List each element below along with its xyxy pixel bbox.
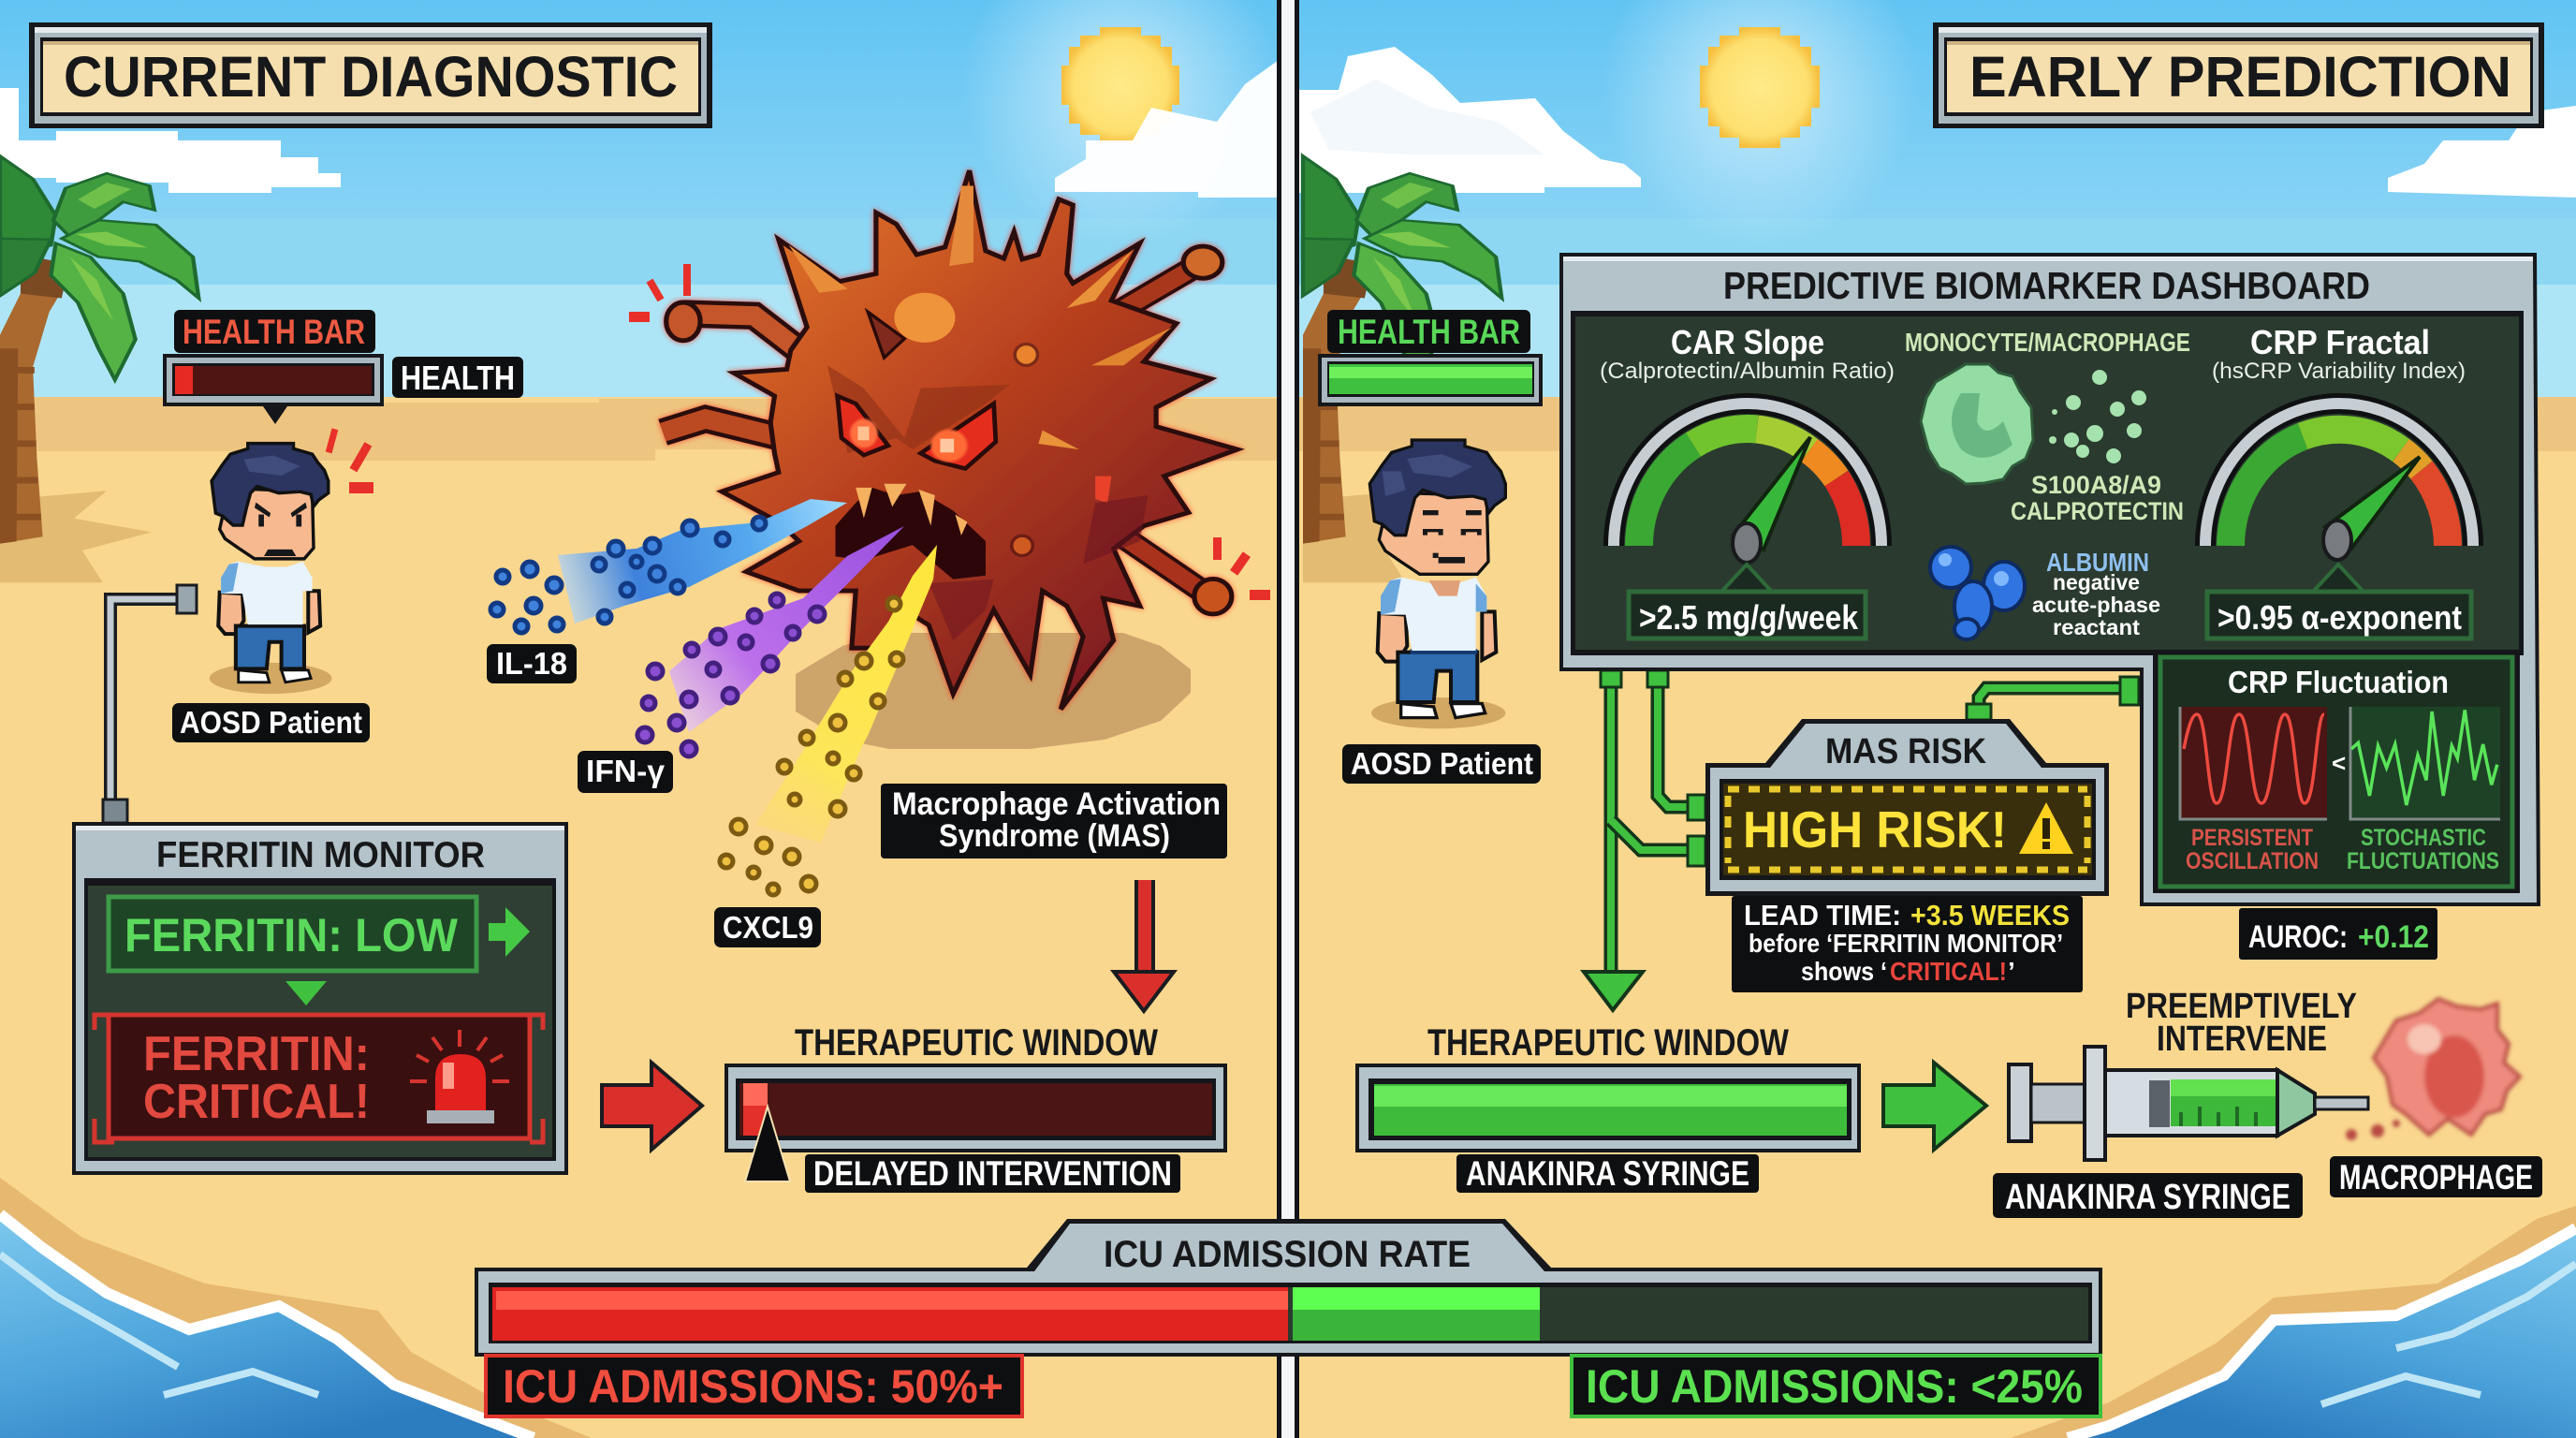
label: IFN-gamma: IFN-γ [586, 754, 666, 788]
label: ICU admissions left: ICU ADMISSIONS: 50%+ [503, 1360, 1003, 1413]
less-than sign: < [2332, 749, 2346, 777]
AUROC callout: AUROC: [2248, 919, 2348, 955]
label: S100A8/A9 calprotectin [2011, 471, 2184, 525]
gauge: CRP fractal [2205, 404, 2473, 560]
callout: lead time: shows ‘ [1801, 957, 1887, 986]
virus shadow [796, 633, 1191, 749]
callout: lead time: before ‘FERRITIN MONITOR’ [1749, 929, 2063, 958]
icon: anakinra syringe [2009, 1047, 2368, 1160]
ferritin low readout: FERRITIN: LOW [124, 909, 459, 961]
left shoreline waves [0, 1178, 592, 1438]
label: macrophage activation syndrome [881, 784, 1227, 858]
right therapeutic window heading: THERAPEUTIC WINDOW [1427, 1022, 1789, 1064]
ferritin critical readout: FERRITIN: [143, 1027, 370, 1081]
label: CXCL9: CXCL9 [723, 910, 813, 945]
left health bar [163, 310, 384, 424]
cytokine spray: IL-18 [490, 499, 847, 633]
green admission bar [1293, 1287, 1540, 1341]
icon: albumin protein [1930, 547, 2025, 639]
dashboard title: PREDICTIVE BIOMARKER DASHBOARD [1723, 264, 2370, 307]
hazard stripes [1728, 789, 2087, 870]
left palm tree [0, 156, 198, 582]
label: albumin: acute-phase [2032, 593, 2160, 617]
red sparks [326, 264, 1270, 600]
heading: current diagnostic [29, 22, 712, 128]
callout: lead time: LEAD TIME: [1744, 899, 1901, 932]
icon: green down arrow [285, 981, 327, 1005]
left health bar: HEALTH BAR [183, 313, 365, 351]
alert text: HIGH RISK! [1743, 800, 2007, 858]
AUROC callout: +0.12 [2358, 919, 2429, 955]
panel: ICU admission rate [475, 1219, 2102, 1357]
right patient label: AOSD Patient [1351, 746, 1533, 781]
right health bar [1318, 310, 1543, 406]
right therapeutic window bar [1355, 1064, 1861, 1152]
marker: delay pointer [745, 1107, 790, 1181]
arrow: MAS down to therapeutic window [1114, 880, 1174, 1011]
label: albumin: negative [2053, 570, 2140, 594]
ferritin critical readout: CRITICAL! [143, 1075, 370, 1129]
gauge heading: CAR slope [1600, 323, 1895, 384]
panel: predictive biomarker dashboard [1559, 253, 2540, 906]
label: albumin [2032, 548, 2160, 639]
callout: lead time: ’ [2008, 957, 2015, 986]
label: preemptively intervene [2126, 987, 2357, 1059]
left patient label: AOSD Patient [180, 705, 362, 740]
caption: stochastic fluctuations: STOCHASTIC [2361, 825, 2486, 851]
label: monocyte macrophage: MONOCYTE/MACROPHAGE [1905, 328, 2190, 357]
label: albumin: ALBUMIN [2046, 548, 2149, 577]
callout: lead time: CRITICAL! [1890, 957, 2007, 986]
gauge heading: CRP fractal: (hsCRP Variability Index) [2212, 359, 2466, 384]
label: anakinra syringe under icon: ANAKINRA SYRINGE [2005, 1178, 2291, 1217]
label: anakinra syringe under bar: ANAKINRA SYRINGE [1466, 1154, 1749, 1193]
caption: stochastic fluctuations [2347, 825, 2499, 874]
right palm tree [1303, 156, 1501, 582]
callout: lead time: +3.5 WEEKS [1910, 899, 2070, 932]
caption: persistent oscillation: PERSISTENT [2191, 825, 2313, 851]
left patient, sad [210, 444, 332, 694]
ferritin low readout [109, 897, 476, 971]
heading: early prediction: EARLY PREDICTION [1969, 45, 2511, 109]
ferritin critical readout [95, 1015, 543, 1142]
virus monster [663, 170, 1237, 710]
panel: MAS risk [1705, 719, 2109, 896]
gauge heading: CRP fractal [2212, 323, 2466, 384]
gauge threshold: CRP fractal [2207, 565, 2471, 638]
sub-panel title: CRP Fluctuation [2228, 665, 2449, 699]
label: preemptively intervene: PREEMPTIVELY [2126, 987, 2357, 1026]
chart: stochastic fluctuations [2349, 707, 2500, 819]
icon: monocyte cell releasing calprotectin [1921, 364, 2146, 484]
label: IFN-gamma [578, 751, 673, 793]
icon: warning triangle [2019, 802, 2073, 854]
label: ICU admissions right: ICU ADMISSIONS: <25% [1586, 1360, 2083, 1413]
label: S100A8/A9 calprotectin: S100A8/A9 [2031, 471, 2161, 499]
arrow: green right [1883, 1063, 1986, 1150]
panel title: FERRITIN MONITOR [156, 835, 485, 875]
label: albumin: reactant [2053, 615, 2140, 639]
label: preemptively intervene: INTERVENE [2157, 1020, 2327, 1059]
gauge threshold: CRP fractal: >0.95 α-exponent [2217, 598, 2462, 637]
gauge: CAR slope [1614, 404, 1881, 563]
label: macrophage activation syndrome: Macrophage Activation [892, 786, 1221, 822]
panel title: MAS RISK [1825, 732, 1987, 771]
right health bar: HEALTH BAR [1338, 313, 1520, 351]
cytokine spray: IFN-gamma [637, 526, 904, 756]
sub-panel: CRP fluctuation [2153, 652, 2520, 893]
caption: persistent oscillation: OSCILLATION [2186, 848, 2319, 874]
ICU title: ICU ADMISSION RATE [1104, 1234, 1471, 1275]
gauge heading: CRP fractal: CRP Fractal [2250, 323, 2430, 361]
right shoreline waves [2011, 1206, 2576, 1438]
icon: alarm siren [410, 1030, 509, 1123]
icon: green right arrow [489, 907, 530, 957]
label: delayed intervention: DELAYED INTERVENTION [813, 1154, 1172, 1193]
red admission bar [492, 1287, 1288, 1341]
connector pipe from patient to ferritin monitor [103, 585, 197, 823]
AUROC callout [2239, 908, 2437, 960]
gauge heading: CAR slope: (Calprotectin/Albumin Ratio) [1600, 359, 1895, 384]
heading: early prediction [1933, 22, 2544, 128]
arrow: green down to therapeutic window [1584, 972, 1643, 1010]
gauge threshold: CAR slope [1629, 565, 1866, 638]
right patient, happy [1369, 440, 1505, 728]
health tag: HEALTH [401, 359, 515, 397]
chart: persistent oscillation [2179, 707, 2327, 819]
gauge threshold: CAR slope: >2.5 mg/g/week [1639, 598, 1859, 637]
caption: stochastic fluctuations: FLUCTUATIONS [2347, 848, 2499, 874]
heading: current diagnostic: CURRENT DIAGNOSTIC [64, 45, 678, 109]
caption: persistent oscillation [2186, 825, 2319, 874]
left therapeutic window heading: THERAPEUTIC WINDOW [795, 1022, 1158, 1064]
left sun [961, 0, 1280, 244]
icon: macrophage cell [2346, 999, 2520, 1140]
gauge heading: CAR slope: CAR Slope [1671, 323, 1824, 361]
left therapeutic window bar [724, 1064, 1227, 1152]
label: IL-18: IL-18 [496, 646, 567, 681]
label: macrophage activation syndrome: Syndrome (MAS) [939, 818, 1170, 854]
clouds [0, 47, 2576, 198]
right sun [1601, 0, 1919, 246]
centre divider [1277, 0, 1299, 1438]
cytokine spray: CXCL9 [720, 545, 937, 895]
panel: ferritin monitor [72, 822, 568, 1175]
green connector pipes [1601, 670, 2139, 974]
label: S100A8/A9 calprotectin: CALPROTECTIN [2011, 497, 2184, 525]
arrow: red right [602, 1063, 702, 1150]
callout: lead time [1732, 896, 2083, 992]
